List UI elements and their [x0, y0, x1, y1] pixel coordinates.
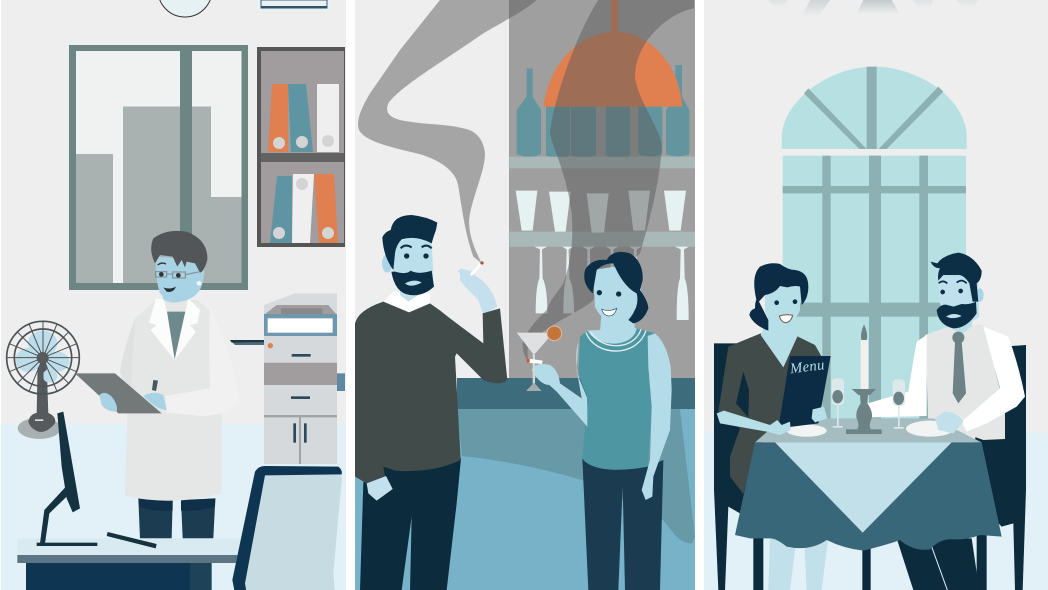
office chair [232, 466, 342, 590]
bar counter [457, 378, 695, 409]
air vent [260, 0, 328, 8]
menu [778, 356, 831, 428]
panel: restaurant scene [704, 0, 1048, 590]
wine glasses [832, 378, 905, 429]
man diner [868, 310, 1025, 590]
lapels [149, 298, 200, 360]
doctor head [151, 231, 207, 302]
clipboard [75, 373, 162, 413]
trousers [582, 458, 663, 590]
ceiling light rays [768, 0, 978, 17]
teal top [578, 328, 655, 470]
pocket hand [367, 476, 393, 501]
neck and chest [586, 328, 636, 344]
shirt [166, 312, 185, 359]
desk fan [7, 321, 79, 439]
trousers [360, 457, 461, 590]
arched restaurant window [782, 67, 967, 439]
neck [162, 296, 182, 302]
legs [768, 537, 828, 590]
far arm [642, 333, 672, 500]
pen and hands [99, 380, 167, 412]
cigarette smoke, man [358, 0, 537, 263]
printer [230, 293, 345, 464]
lab coat [120, 300, 222, 501]
sweater [355, 302, 507, 483]
coat sleeve [166, 312, 222, 416]
doctor [75, 296, 222, 538]
man's raised hand [460, 268, 497, 315]
office window with skyline [69, 45, 248, 290]
bar back wall [509, 0, 695, 378]
vest [925, 325, 1005, 440]
table top [755, 418, 982, 442]
bookshelf with binders [257, 47, 345, 247]
shirt [868, 335, 927, 417]
man head and beard [931, 253, 984, 328]
panel: office scene [0, 0, 346, 590]
tie [952, 332, 966, 403]
bar shelves, bottles and glasses [509, 65, 695, 320]
menu: Menu [788, 357, 826, 377]
tablecloth [735, 442, 1002, 551]
candle [846, 324, 882, 434]
head and hair [749, 263, 808, 331]
near arm with hand [532, 342, 587, 427]
desk [17, 532, 241, 590]
woman diner [718, 263, 828, 590]
wall clock [158, 0, 212, 17]
cloth centre [775, 442, 952, 533]
counter shadow [457, 409, 695, 543]
neck [761, 317, 797, 367]
shirt collar and neck [383, 292, 430, 312]
pendant lamp [543, 0, 682, 107]
dress [718, 333, 822, 494]
computer monitor [37, 412, 97, 546]
dinner table [717, 324, 1002, 551]
trousers [138, 498, 215, 538]
neck [945, 310, 975, 334]
panel: bar scene [355, 0, 695, 590]
man in sweater [355, 268, 507, 590]
man head and beard [382, 215, 484, 295]
woman head and hair [584, 252, 648, 323]
floor [355, 409, 695, 590]
trousers [897, 538, 979, 590]
martini glass [517, 326, 562, 391]
dining chairs [714, 343, 1026, 590]
man hand [935, 412, 963, 433]
plates [787, 421, 954, 437]
cigarette smoke, woman [523, 0, 694, 359]
woman arm and hands [717, 407, 827, 435]
woman in teal top [517, 310, 672, 590]
